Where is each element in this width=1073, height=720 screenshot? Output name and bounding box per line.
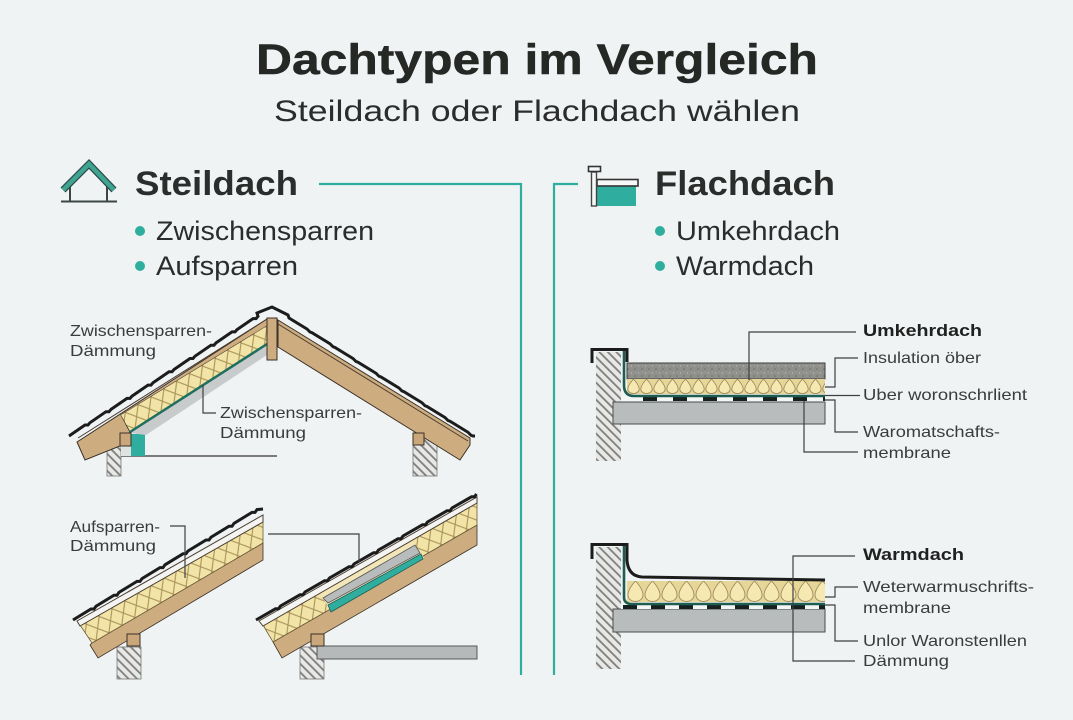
labels: Umkehrdach: Uber woronschrlient — [863, 387, 1028, 404]
labels: Warmdach: Warmdach — [863, 545, 964, 564]
diagram: above-rafter insulation detail right — [256, 494, 477, 679]
labels: Umkehrdach — [863, 321, 1028, 462]
list: Steildach types: Zwischensparren — [156, 216, 374, 246]
label: Zwischensparren-Dämmung top — [70, 323, 212, 360]
labels: Warmdach — [863, 545, 1034, 670]
label: Aufsparren-Dämmung: Dämmung — [70, 538, 156, 555]
diagram: Umkehrdach section — [592, 350, 825, 461]
labels: Warmdach: Unlor Waronstenllen — [863, 633, 1027, 650]
leader lines: Umkehrdach — [749, 332, 860, 452]
panel heading: Steildach: Steildach — [135, 165, 298, 203]
leader: Aufsparren-Dämmung — [170, 526, 185, 578]
labels: Umkehrdach: Insulation öber — [863, 350, 982, 367]
labels: Warmdach: membrane — [863, 600, 951, 617]
labels: Warmdach: Dämmung — [863, 653, 949, 670]
label: Zwischensparren-Dämmung top: Dämmung — [70, 343, 156, 360]
label: Zwischensparren-Dämmung lower: Dämmung — [220, 425, 306, 442]
list: Flachdach types: Warmdach — [676, 251, 814, 281]
label: Zwischensparren-Dämmung lower: Zwischensparren- — [220, 405, 362, 422]
list: Steildach types: Aufsparren — [156, 251, 298, 281]
diagram: Warmdach section — [592, 544, 825, 669]
label: Aufsparren-Dämmung — [70, 519, 160, 555]
labels: Warmdach: Weterwarmuschrifts- — [863, 579, 1034, 596]
label: Aufsparren-Dämmung: Aufsparren- — [70, 519, 160, 536]
diagram: pitched roof with rafter insulation — [69, 307, 475, 476]
label: Zwischensparren-Dämmung top: Zwischensparren- — [70, 323, 212, 340]
icon: flat roof — [588, 166, 638, 206]
subtitle: Steildach oder Flachdach wählen — [274, 95, 800, 128]
list: Steildach types — [135, 216, 374, 281]
list: Flachdach types: Umkehrdach — [676, 216, 840, 246]
icon: pitched roof house — [61, 164, 117, 202]
labels: Umkehrdach: Umkehrdach — [863, 321, 982, 340]
leader lines: Warmdach — [793, 556, 858, 661]
title: Dachtypen im Vergleich — [256, 36, 818, 84]
label: Zwischensparren-Dämmung lower — [220, 405, 362, 442]
list: Flachdach types — [655, 216, 840, 281]
labels: Umkehrdach: Waromatschafts- — [863, 424, 1000, 441]
labels: Umkehrdach: membrane — [863, 445, 951, 462]
divider lines — [319, 184, 578, 675]
panel heading: Flachdach: Flachdach — [655, 165, 835, 203]
leader: detail right — [268, 534, 359, 562]
diagram: above-rafter insulation detail left — [73, 509, 263, 679]
leader: Zwischensparren-Dämmung — [203, 385, 216, 413]
